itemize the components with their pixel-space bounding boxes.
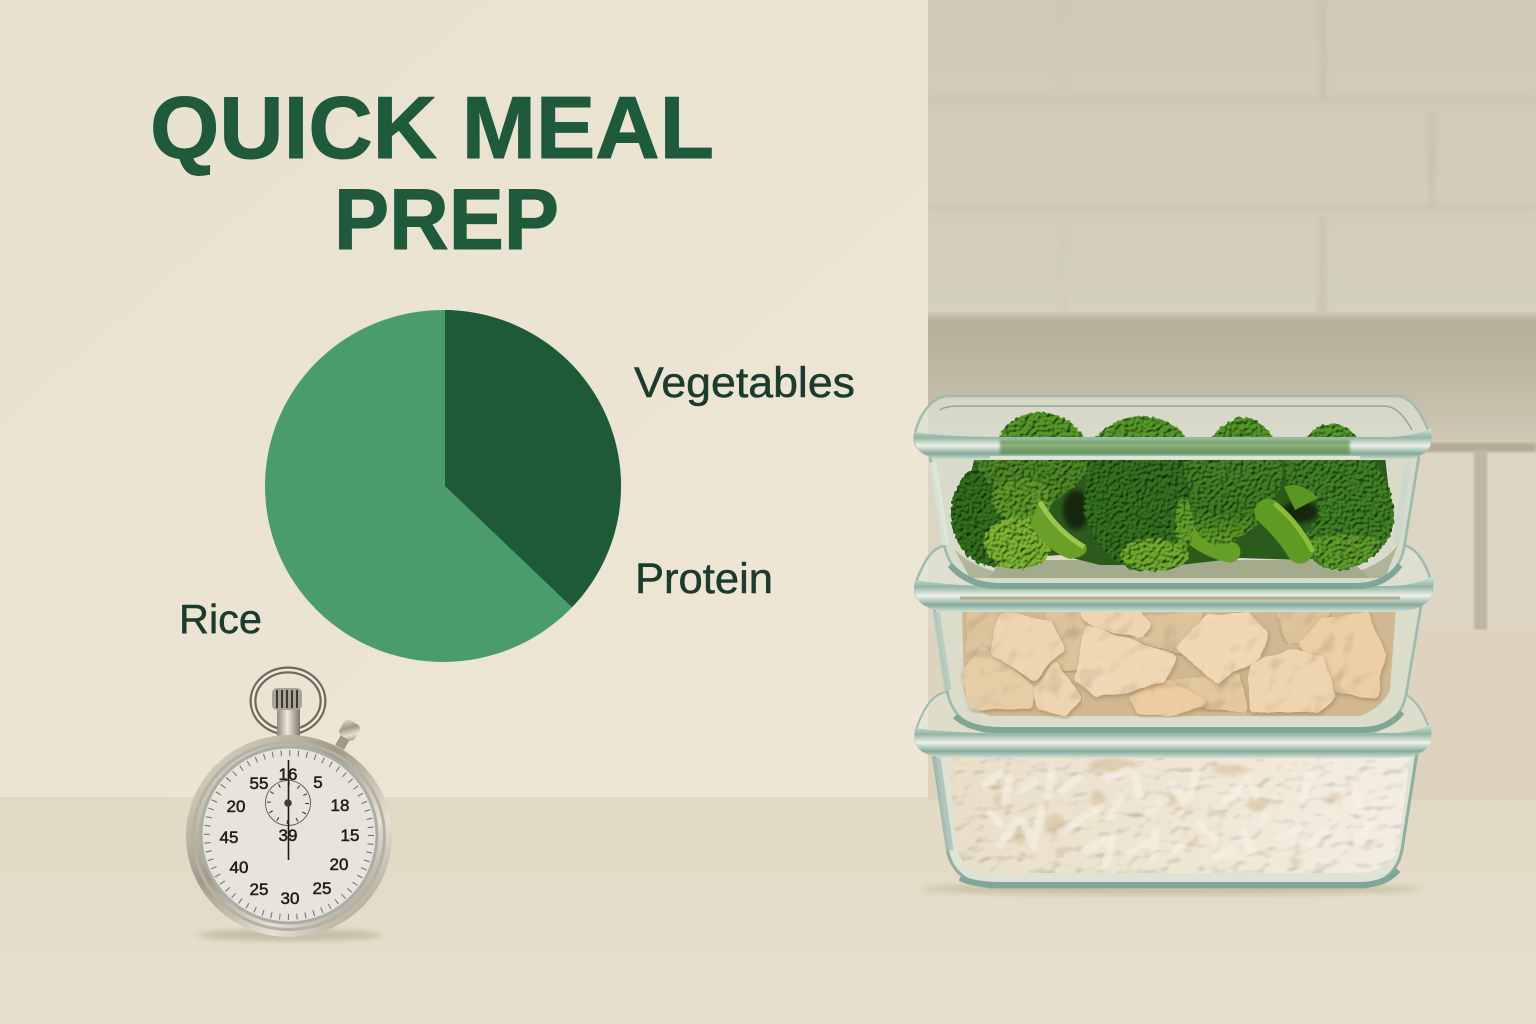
stopwatch crown — [272, 688, 362, 752]
stem of floret 3 — [1268, 505, 1312, 550]
label: Protein: Protein — [635, 555, 773, 603]
glass rim front: chicken container — [914, 576, 1434, 612]
glass rim back: broccoli container — [915, 396, 1430, 458]
pie chart — [265, 310, 621, 662]
stopwatch numerals: 16 — [279, 765, 297, 784]
food: broccoli — [951, 412, 1394, 571]
panel: paper card — [0, 0, 928, 797]
background: kitchen wall — [928, 0, 1536, 632]
stopwatch numerals: 45 — [220, 828, 238, 847]
glass rim front: broccoli container — [914, 428, 1432, 460]
floret 2 — [1083, 458, 1193, 571]
stem of floret 4 — [1284, 485, 1318, 510]
background: countertop — [0, 630, 1536, 1024]
glass body: broccoli container — [930, 455, 1419, 588]
glass rim back: chicken container — [915, 545, 1432, 609]
stem of floret 2 — [1188, 530, 1230, 552]
floret 3 — [1184, 458, 1283, 545]
title — [150, 78, 714, 268]
stopwatch ring — [253, 670, 323, 732]
broccoli backing — [960, 456, 1392, 565]
stopwatch numerals — [220, 765, 359, 908]
label: Vegetables: Vegetables — [634, 359, 855, 407]
floret 1 — [951, 458, 1092, 569]
stopwatch numerals: 20 — [330, 855, 348, 874]
floret 4 — [1284, 458, 1394, 570]
container: chicken — [914, 545, 1434, 733]
title: QUICK MEAL — [150, 78, 714, 177]
stopwatch numerals: 5 — [313, 773, 323, 792]
container: rice — [914, 692, 1432, 895]
label: Rice: Rice — [179, 596, 262, 642]
stopwatch numerals: 15 — [341, 826, 359, 845]
stopwatch numerals: 40 — [230, 858, 248, 877]
stopwatch subdial and hand — [266, 760, 310, 860]
stopwatch case — [186, 735, 392, 937]
pie slice: vegetables and protein — [445, 310, 621, 607]
stopwatch numerals: 20 — [227, 797, 245, 816]
stopwatch numerals: 25 — [313, 879, 331, 898]
stopwatch numerals: 39 — [279, 826, 297, 845]
glass body: rice container — [933, 752, 1417, 887]
stopwatch numerals: 55 — [250, 774, 268, 793]
food: chicken — [962, 608, 1396, 716]
stopwatch numerals: 25 — [250, 880, 268, 899]
glass rim: rice container — [914, 692, 1432, 758]
container: broccoli — [914, 396, 1432, 588]
stopwatch numerals: 30 — [281, 889, 299, 908]
stem of floret 1 — [1030, 498, 1087, 559]
floret tops above rim — [997, 412, 1360, 442]
dark shadows — [1063, 490, 1318, 530]
glass body: chicken container — [934, 606, 1421, 733]
title: PREP — [334, 172, 559, 268]
stopwatch numerals: 18 — [331, 796, 349, 815]
icon: stopwatch — [186, 670, 392, 941]
food: rice — [948, 756, 1410, 873]
